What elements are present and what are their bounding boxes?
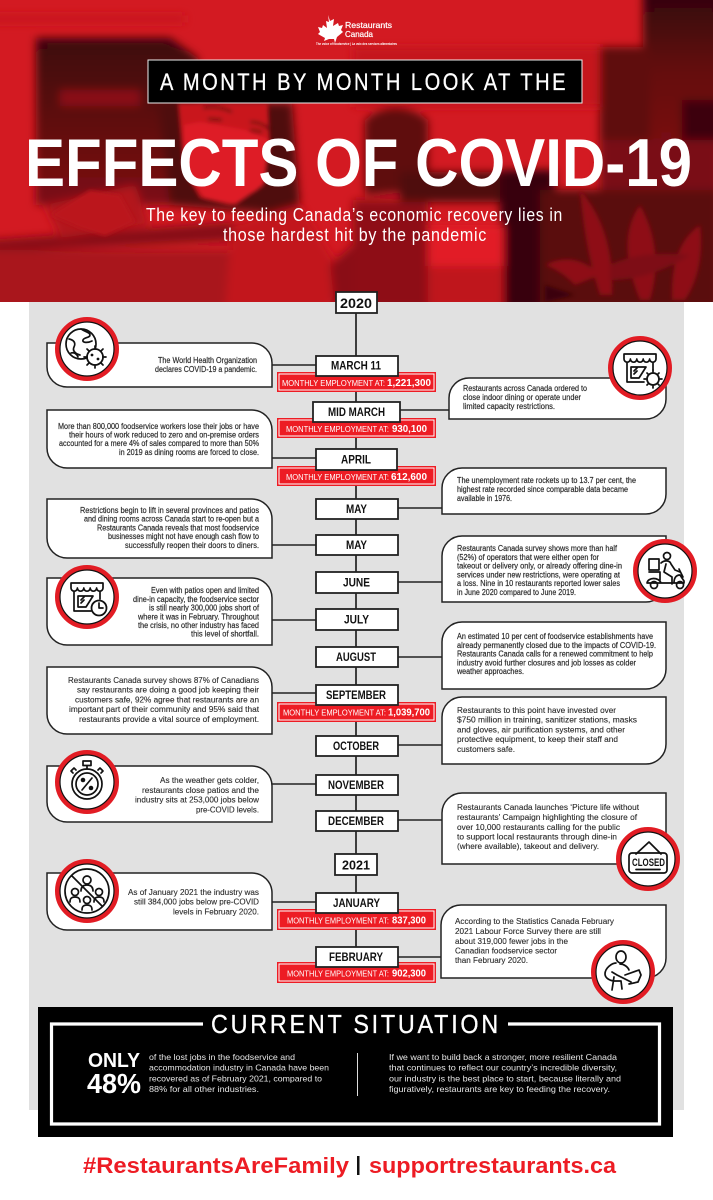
logo: Restaurants Canada	[316, 15, 397, 46]
month: July: JULY	[344, 614, 369, 626]
employment bar: September: MONTHLY EMPLOYMENT AT:	[283, 708, 386, 718]
stat description: accommodation industry in Canada have been	[149, 1063, 329, 1073]
employment bar: Mid March: MONTHLY EMPLOYMENT AT:	[286, 424, 389, 434]
card text: this level of shortfall.	[191, 630, 259, 638]
title banner: A MONTH BY MONTH LOOK AT THE	[160, 69, 568, 96]
card text: the crisis, no other industry has faced	[138, 621, 259, 630]
card text: Restaurants Canada calls for a renewed commitment to help	[457, 650, 654, 659]
woman's face and mask	[50, 103, 270, 236]
card text: industry sits at 253,000 jobs below	[135, 795, 260, 805]
card text	[68, 675, 260, 724]
employment bar: Mid March: 930,100	[392, 423, 427, 435]
card text	[58, 422, 260, 457]
card text: where it was in February. Throughout	[137, 612, 260, 621]
card: WHO declares pandemic	[47, 343, 272, 387]
logo: Restaurants Canada: Restaurants	[345, 21, 392, 30]
recovery statement: that continues to reflect our country’s incredible diversity,	[389, 1063, 617, 1073]
card text: is still nearly 300,000 jobs short of	[149, 604, 260, 613]
employment bar: February: 902,300	[392, 968, 426, 980]
card text: and gloves, air purification systems, and other	[457, 724, 625, 734]
card: Canadians survey	[47, 667, 272, 734]
year: 2020: 2020	[340, 295, 372, 311]
card text: More than 800,000 foodservice workers lose their jobs or have	[58, 422, 260, 431]
card text: An estimated 10 per cent of foodservice establishments have	[457, 632, 654, 641]
employment bar: April	[277, 466, 436, 486]
year: 2020	[336, 292, 377, 313]
employment bar: September	[277, 702, 436, 722]
month: April: APRIL	[341, 454, 371, 466]
card text	[80, 506, 260, 550]
month: January	[316, 893, 398, 913]
icon: delivery scooter	[636, 542, 694, 600]
month: May	[316, 535, 398, 555]
icon: no gatherings	[58, 862, 116, 920]
card text: successfully reopen their doors to diners.	[125, 541, 259, 550]
card: jobs shortfall	[47, 578, 272, 645]
frame	[52, 1024, 660, 1124]
logo: Restaurants Canada: Canada	[345, 30, 373, 39]
heading: current situation: CURRENT SITUATION	[211, 1011, 501, 1039]
connectors	[272, 365, 449, 957]
card text: weather approaches.	[456, 667, 524, 676]
card text: Restaurants Canada survey shows 87% of Canadians	[68, 675, 260, 685]
card text: still 384,000 jobs below pre-COVID	[134, 897, 259, 907]
icon: stopwatch with percent	[58, 752, 116, 812]
month: November	[316, 775, 398, 795]
employment bar: April: MONTHLY EMPLOYMENT AT:	[286, 472, 389, 482]
icon: storefront with virus	[610, 338, 670, 398]
card text: highest rate recorded since comparable data became	[457, 485, 629, 494]
recovery statement: If we want to build back a stronger, more resilient Canada	[389, 1052, 617, 1062]
month: November: NOVEMBER	[328, 779, 385, 792]
card text	[463, 384, 588, 411]
card text: in 2019 as dining rooms are forced to close.	[119, 448, 259, 457]
icon: storefront with clock	[58, 568, 116, 626]
month: February: FEBRUARY	[329, 951, 383, 964]
stat: only 48%: ONLY	[88, 1050, 141, 1072]
stat: only 48%: 48%	[87, 1068, 141, 1099]
card text: takeout or delivery only, or already offering dine-in	[457, 562, 622, 571]
employment bar: March 11: MONTHLY EMPLOYMENT AT:	[282, 378, 385, 388]
month: December	[316, 811, 398, 831]
month: April	[316, 449, 397, 470]
icon: closed sign	[618, 830, 678, 888]
stat: only 48%	[87, 1050, 141, 1099]
card: job losses	[47, 410, 272, 468]
card text	[457, 705, 638, 754]
plant leaves	[545, 190, 701, 302]
card text: The unemployment rate rockets up to 13.7 per cent, the	[457, 476, 637, 485]
card text: in June 2020 compared to June 2019.	[457, 588, 576, 597]
card text: restaurants close patios and the	[142, 785, 259, 795]
card text	[456, 632, 656, 676]
card text: their hours of work reduced to zero and on-premise orders	[69, 430, 259, 440]
card text: than February 2020.	[455, 955, 528, 965]
card text: dine-in capacity, the foodservice sector	[133, 595, 259, 604]
card: January 2021	[47, 873, 272, 930]
card text: Restaurants to this point have invested over	[457, 705, 616, 715]
card text: Restrictions begin to lift in several provinces and patios	[80, 506, 259, 515]
card text: restaurants provide a vital source of employment.	[79, 714, 259, 724]
stat description: of the lost jobs in the foodservice and	[149, 1052, 295, 1062]
card text: declares COVID-19 a pandemic.	[155, 365, 257, 374]
month: December: DECEMBER	[328, 815, 385, 828]
year: 2021	[335, 854, 377, 875]
month: February	[316, 947, 398, 967]
timeline axis	[355, 300, 357, 965]
month: June	[316, 572, 398, 593]
month: July	[316, 609, 398, 630]
card text	[457, 802, 640, 851]
card: safety investment	[442, 697, 666, 764]
month: August: AUGUST	[336, 651, 376, 664]
subtitle: The key to feeding Canada’s economic recovery lies in	[146, 204, 563, 225]
card text: Restaurants Canada survey shows more than half	[457, 544, 618, 553]
card text	[455, 916, 615, 965]
month: May	[316, 499, 398, 519]
card: Labour Force Survey	[441, 905, 666, 978]
card: unemployment rate	[442, 468, 666, 514]
stat description: 88% for all other industries.	[149, 1084, 259, 1094]
stat description: recovered as of February 2021, compared to	[149, 1073, 322, 1083]
header photo background	[0, 0, 713, 310]
card text: Canadian foodservice sector	[455, 946, 557, 956]
employment bar: Mid March	[277, 418, 436, 438]
icon: maple leaf	[318, 15, 343, 43]
month: September	[316, 685, 398, 705]
card text	[135, 775, 260, 814]
footer hashtag and url: #RestaurantsAreFamily	[83, 1153, 350, 1178]
panel: timeline background	[29, 302, 684, 1110]
icon: globe and virus	[58, 320, 116, 378]
card text: already permanently closed due to the impacts of COVID-19.	[457, 641, 656, 650]
card text: businesses might not have enough cash flow to	[108, 532, 260, 541]
card text: Restaurants Canada launches ‘Picture life without	[457, 802, 640, 812]
month: March 11: MARCH 11	[331, 360, 381, 372]
card text: As the weather gets colder,	[160, 775, 259, 785]
employment bar: January: MONTHLY EMPLOYMENT AT:	[287, 916, 389, 926]
divider	[356, 1053, 358, 1096]
employment bar: February	[277, 962, 436, 983]
card text: and dining rooms across Canada start to re-open but a	[84, 515, 260, 524]
card text: a loss. Nine in 10 restaurants reported lower sales	[457, 579, 620, 588]
card: permanent closures	[442, 622, 666, 689]
month: August	[316, 647, 398, 667]
panel: current situation	[38, 1007, 673, 1137]
month: September: SEPTEMBER	[326, 689, 387, 702]
month: May: MAY	[346, 503, 367, 516]
card: restrictions lift	[47, 499, 272, 558]
card text: Restaurants Canada reveals that most foodservice	[97, 524, 260, 532]
month: Mid March: MID MARCH	[328, 406, 385, 419]
employment bar: March 11	[277, 372, 436, 392]
card text: customers safe, 92% agree that restaurants are an	[75, 694, 259, 704]
card text: to support local restaurants through dine-in	[457, 832, 617, 842]
employment bar: January	[277, 909, 436, 930]
month: October	[316, 736, 398, 756]
month: January: JANUARY	[333, 897, 380, 910]
card text: about 319,000 fewer jobs in the	[455, 936, 568, 946]
card text: restaurants’ Campaign highlighting the closure of	[457, 812, 638, 822]
employment bar: January: 837,300	[392, 914, 426, 926]
card: campaign launch	[442, 793, 666, 864]
month: Mid March	[313, 402, 400, 422]
employment bar: April: 612,600	[391, 471, 427, 483]
card text: (where available), takeout and delivery.	[457, 841, 599, 851]
card text: Restaurants across Canada ordered to	[463, 384, 588, 393]
card text	[457, 476, 637, 503]
footer hashtag and url: supportrestaurants.ca	[369, 1153, 617, 1178]
recovery statement: our industry is the best place to start, because literally and	[389, 1073, 621, 1083]
footer hashtag and url	[83, 1153, 617, 1178]
card: operators at a loss	[442, 536, 666, 602]
recovery statement	[389, 1052, 621, 1094]
subtitle: those hardest hit by the pandemic	[223, 224, 487, 245]
card text: important part of their community and 95% said that	[69, 704, 260, 714]
subtitle	[146, 204, 563, 245]
year: 2021: 2021	[342, 858, 370, 872]
employment bar: September: 1,039,700	[388, 706, 430, 718]
recovery statement: figuratively, restaurants are key to feeding the recovery.	[389, 1084, 610, 1094]
logo: Restaurants Canada: The voice of foodservice | La voix des services alimentaires	[316, 42, 397, 46]
card text: say restaurants are doing a good job keeping their	[77, 685, 259, 695]
card text: limited capacity restrictions.	[463, 402, 555, 411]
icon: closed sign: CLOSED	[632, 857, 665, 869]
card text: 2021 Labour Force Survey there are still	[455, 926, 601, 936]
month: June: JUNE	[343, 576, 370, 590]
card text: close indoor dining or operate under	[463, 393, 581, 402]
icon: person with tablet	[594, 942, 652, 1002]
title banner	[148, 60, 582, 103]
card text: available in 1976.	[457, 494, 512, 503]
card text	[133, 586, 260, 638]
card text: Even with patios open and limited	[151, 586, 259, 595]
employment bar: February: MONTHLY EMPLOYMENT AT:	[287, 968, 389, 978]
stat description	[149, 1052, 329, 1094]
card text	[457, 544, 622, 597]
card text: protective equipment, to keep their staff and	[457, 734, 618, 744]
card text	[155, 356, 257, 374]
card text: services under new restrictions, were operating at	[457, 570, 621, 580]
month: October: OCTOBER	[333, 740, 379, 753]
card: indoor dining closed	[449, 378, 666, 419]
card text: According to the Statistics Canada February	[455, 916, 615, 926]
month: May: MAY	[346, 539, 367, 552]
employment bar: March 11: 1,221,300	[387, 377, 431, 389]
card: colder weather	[47, 766, 272, 822]
card text	[128, 887, 260, 916]
card text: $750 million in training, sanitizer stations, masks	[457, 715, 638, 725]
card text: levels in February 2020.	[173, 906, 259, 916]
card text: over 10,000 restaurants calling for the public	[457, 822, 621, 832]
card text: accounted for a mere 4% of sales compared to more than 50%	[59, 439, 259, 448]
month: March 11	[316, 356, 398, 376]
card text: (52%) of operators that were either open for	[457, 553, 599, 562]
card text: industry avoid further closures and job losses as colder	[457, 658, 636, 668]
card text: pre-COVID levels.	[196, 804, 259, 814]
card text: customers safe.	[457, 744, 515, 754]
card text: The World Health Organization	[158, 356, 257, 365]
card text: As of January 2021 the industry was	[128, 887, 260, 897]
